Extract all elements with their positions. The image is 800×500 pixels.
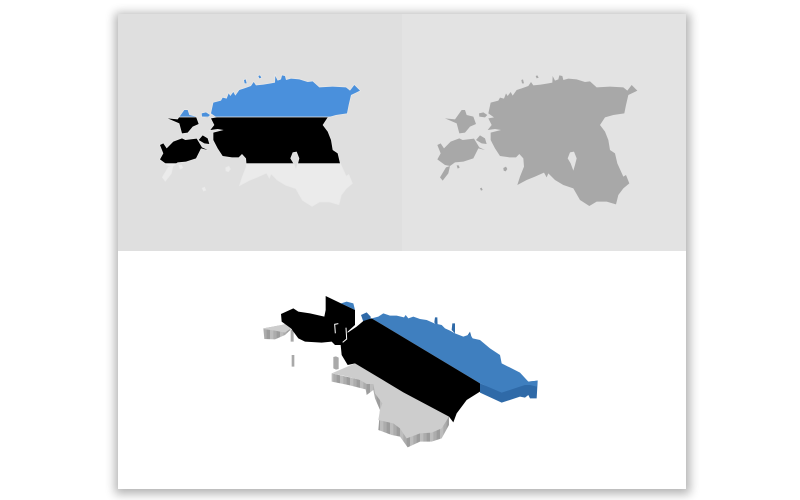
blue spikes	[361, 312, 472, 338]
black mainland top	[341, 318, 480, 422]
panel: gray map background	[402, 14, 686, 251]
gray west island extrusion	[263, 323, 291, 339]
gray top face	[332, 363, 449, 438]
black island	[281, 296, 355, 345]
small island pillars	[291, 330, 339, 370]
island outline	[335, 324, 347, 342]
gray extrusion	[332, 373, 449, 447]
infographic: Estonia map set	[109, 7, 696, 500]
blue north tip on island	[341, 302, 355, 310]
map: Estonia gray silhouette	[437, 75, 637, 206]
panel: flag map background	[118, 14, 402, 251]
gray west island top	[263, 323, 291, 333]
map: Estonia 3D flag	[263, 296, 538, 447]
map: Estonia flag silhouette	[160, 75, 360, 206]
white card	[118, 14, 686, 489]
blue top face	[372, 313, 538, 393]
blue extrusion	[480, 381, 538, 403]
panel shadow	[115, 13, 690, 494]
